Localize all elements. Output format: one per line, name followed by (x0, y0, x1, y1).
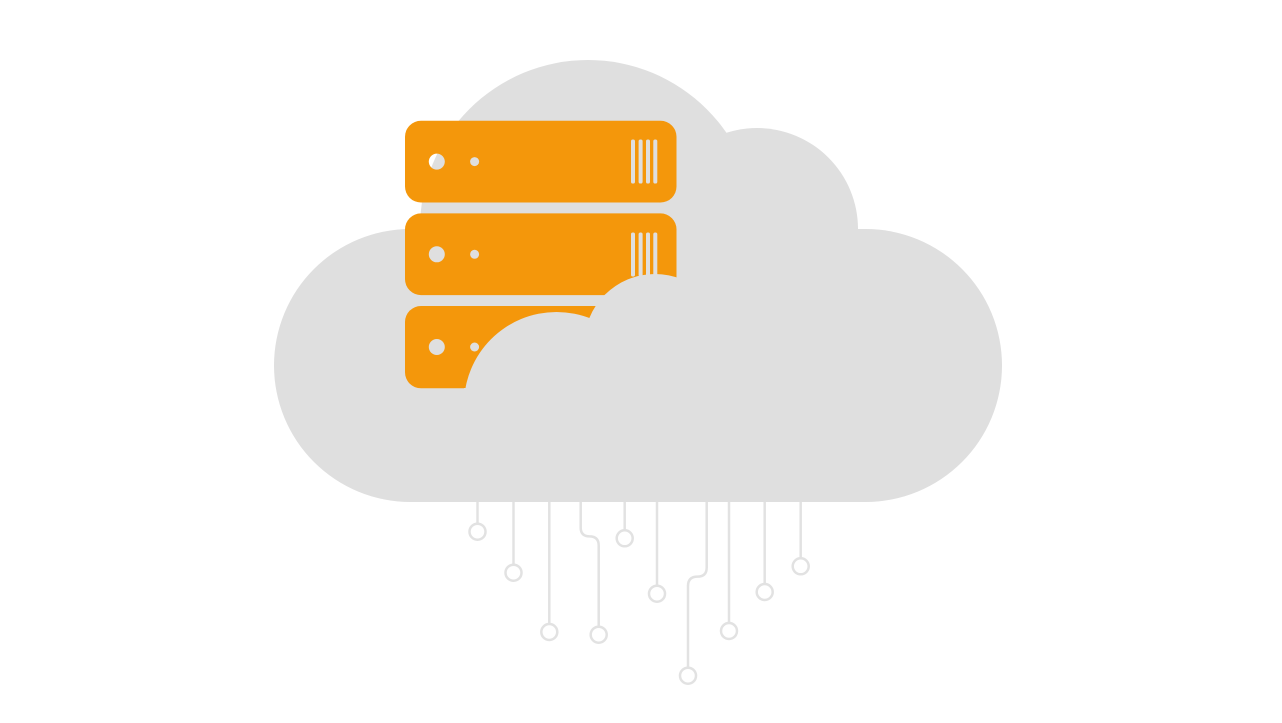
circuit node 9 (757, 502, 773, 600)
circuit node 8 (721, 502, 737, 639)
circuit node 1 (470, 502, 486, 540)
server unit: top (405, 121, 676, 202)
circuit node 10 (793, 502, 809, 574)
server unit: middle (405, 213, 676, 295)
circuit node 3 (541, 502, 557, 640)
cloud: front lobes overlapping the server (464, 274, 730, 502)
circuit node 4 (581, 502, 607, 643)
circuit node 6 (649, 502, 665, 602)
circuit node 7 (680, 502, 707, 684)
circuit node 5 (617, 502, 633, 546)
circuit lines with round nodes (470, 502, 809, 684)
server rack (405, 121, 676, 388)
illustration: cloud server with circuit lines (274, 60, 1002, 685)
cloud: back silhouette (274, 60, 1002, 502)
server unit: bottom (405, 306, 596, 388)
circuit node 2 (506, 502, 522, 581)
